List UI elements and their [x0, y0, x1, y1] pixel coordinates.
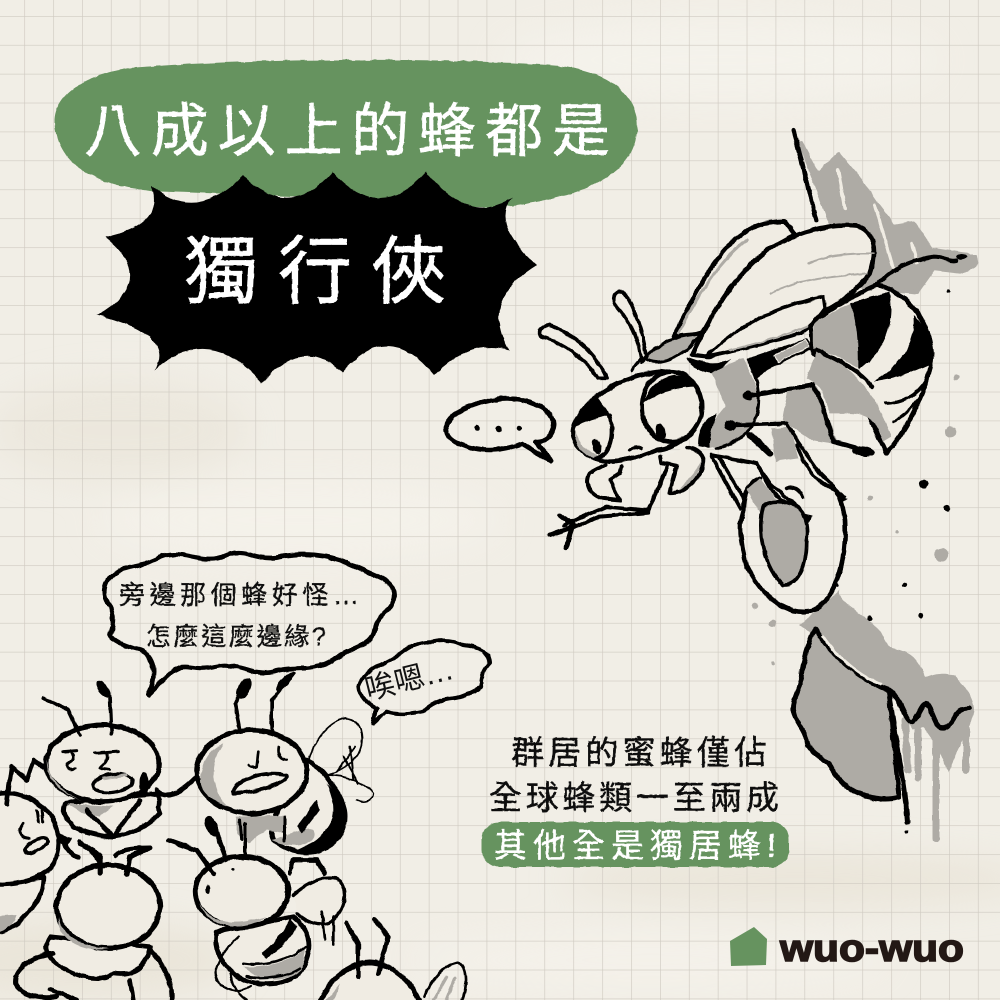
callout: green highlight pill [482, 822, 789, 867]
logo: wuo-wuo [730, 927, 964, 970]
speech bubble: ellipsis [446, 399, 554, 460]
panel: black burst [97, 172, 537, 383]
text: highlight: 其他全是獨居蜂! [494, 827, 776, 864]
small wing [707, 297, 825, 357]
big wing [692, 226, 874, 357]
gray wedge behind head [645, 333, 700, 362]
bee: center-right wing [293, 878, 344, 924]
text: line one: 群居的蜜蜂僅佔 [511, 734, 767, 771]
text: bubble line one: 旁邊那個蜂好怪… [119, 580, 359, 610]
bee: center-right abdomen [216, 917, 309, 984]
bee: top-left bee body [64, 793, 160, 837]
callout: speech bubble of group bees [105, 553, 394, 695]
bee: bottom bee [425, 962, 466, 1000]
gray backdrop brush [801, 143, 976, 292]
ink dots [752, 289, 960, 834]
legs [748, 385, 870, 452]
bee: right-top abdomen [272, 760, 345, 852]
text: line two: 全球蜂類一至兩成 [489, 779, 779, 816]
bee: right-top thorax [237, 815, 287, 843]
antennae [540, 325, 607, 378]
illustration: gray leaf and stem [793, 590, 974, 838]
illustration: large solitary bee [540, 131, 978, 834]
illustration: group of honey bees [0, 670, 466, 1000]
bee: far-left bee [0, 873, 43, 933]
thorax [707, 358, 758, 448]
icon: house [730, 927, 767, 966]
bee: top-left head [46, 725, 159, 802]
text: bubble line two: 怎麼這麼邊緣? [146, 623, 326, 651]
bee: right-top head [197, 730, 307, 813]
heading: title line one: 八成以上的蜂都是 [84, 99, 610, 164]
callout: small speech bubble [358, 641, 490, 723]
bee: right-top wing [308, 718, 373, 802]
waist [748, 338, 813, 378]
honeycomb ring [740, 478, 845, 612]
antenna right [878, 257, 957, 283]
underside gray [783, 387, 837, 443]
back wing [673, 222, 795, 337]
bee: center-right head [195, 857, 288, 927]
heading: 獨行俠: 獨行俠 [184, 230, 446, 313]
text block: group bee statistic [489, 734, 779, 816]
bee: center-left head [47, 937, 150, 978]
text: 唉嗯: 唉嗯… [362, 653, 457, 707]
abdomen [810, 285, 932, 453]
text: brand name: wuo-wuo [779, 928, 964, 970]
panel: green title banner [55, 60, 637, 207]
mandibles [587, 465, 622, 500]
arm [563, 467, 667, 527]
bee: center-left wings and legs [15, 950, 172, 1000]
head [572, 372, 700, 462]
